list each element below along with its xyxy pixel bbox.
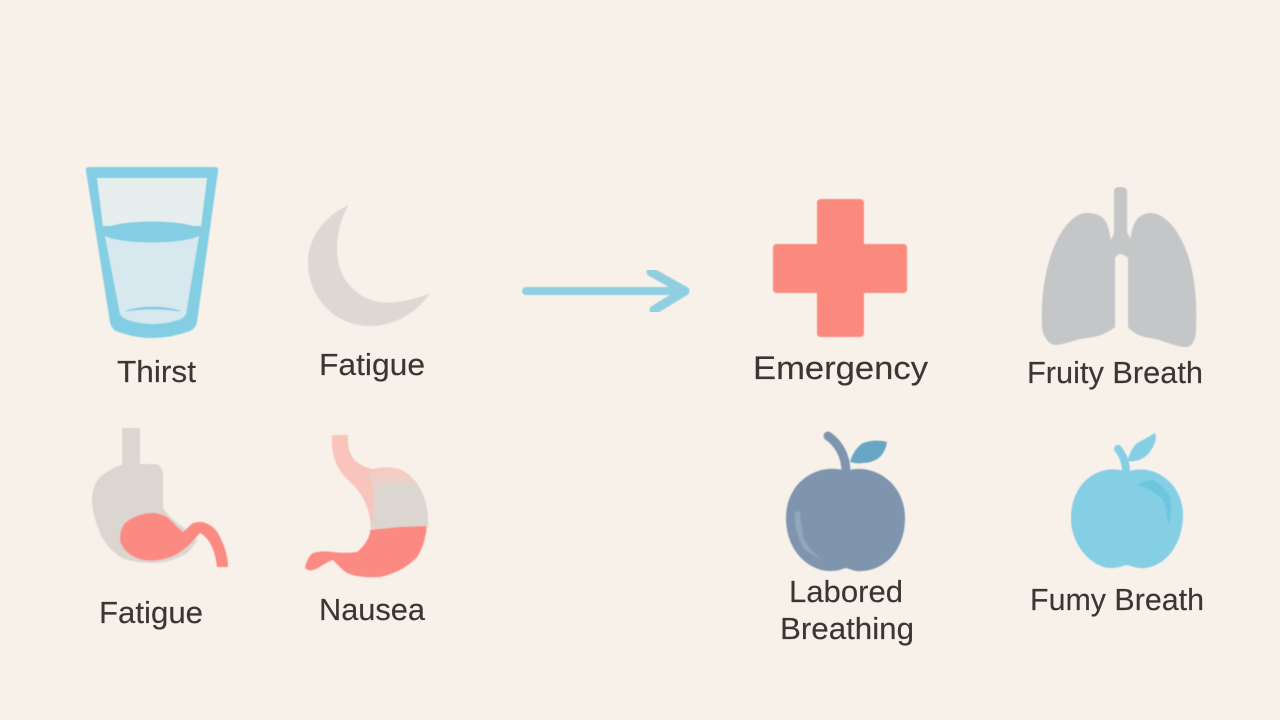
icon: stomach with grey band xyxy=(305,435,428,577)
label: Labored Breathing xyxy=(780,574,914,646)
label: Fumy Breath: Fumy Breath xyxy=(1030,582,1204,617)
symptom: thirst xyxy=(86,167,218,389)
symptom: labored breathing xyxy=(780,436,914,646)
label: Fruity Breath: Fruity Breath xyxy=(1027,355,1203,390)
symptom: nausea xyxy=(305,435,428,627)
label: Thirst: Thirst xyxy=(117,354,196,389)
panel: emergency symptoms xyxy=(753,187,1204,646)
label: Fatigue: Fatigue xyxy=(319,347,425,382)
symptom: fatigue (moon) xyxy=(308,205,430,382)
icon: slate apple xyxy=(786,436,905,571)
symptom: emergency xyxy=(753,199,928,386)
icon: stomach with pink lower part xyxy=(92,428,228,567)
label: Nausea: Nausea xyxy=(319,592,426,627)
symptom: fruity breath xyxy=(1027,187,1203,390)
label: Emergency: Emergency xyxy=(753,350,928,386)
icon: crescent moon xyxy=(308,205,430,326)
label: Labored Breathing: Breathing xyxy=(780,611,914,646)
arrow xyxy=(526,272,685,310)
label: Labored Breathing: Labored xyxy=(789,574,903,609)
icon: medical cross xyxy=(773,199,907,337)
label: Fatigue: Fatigue xyxy=(99,595,203,630)
panel: early symptoms xyxy=(86,167,430,630)
icon: glass of water xyxy=(86,167,218,338)
symptom: fumy breath xyxy=(1030,433,1204,617)
icon: lungs xyxy=(1042,187,1196,347)
icon: blue apple xyxy=(1071,433,1183,568)
symptom: fatigue (stomach) xyxy=(92,428,228,630)
